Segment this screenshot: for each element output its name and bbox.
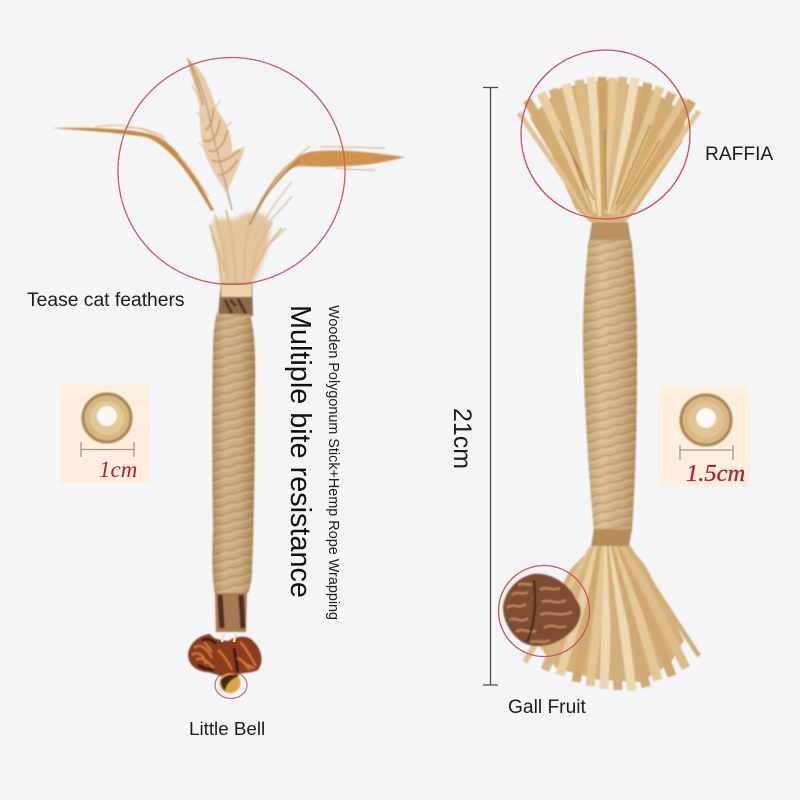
inset: 1.5cm cross-section (659, 386, 749, 487)
right toy: raffia stick (503, 77, 699, 691)
heading: multiple bite resistance: Multiple bite resistance (284, 305, 316, 598)
inset: 1cm cross-section (60, 385, 150, 484)
bell circle (215, 672, 247, 698)
highlight circle: raffia (521, 50, 690, 219)
label: tease cat feathers: Tease cat feathers (27, 290, 185, 311)
raffia: bottom skirt (525, 545, 699, 691)
collar: top (588, 222, 632, 248)
string: fruit to wood (222, 632, 236, 642)
label: little bell: Little Bell (189, 718, 265, 739)
inset: 1.5cm cross-section: 1.5cm (686, 460, 745, 487)
gall fruits (188, 634, 261, 677)
feather: long left (52, 128, 214, 211)
raffia: top fan (519, 77, 699, 222)
feather: centre (187, 58, 245, 212)
feather: down tuft (212, 212, 270, 284)
inset: 1cm cross-section: 1cm (99, 457, 137, 482)
feather: right (248, 151, 405, 228)
wood: top (218, 283, 253, 316)
label: raffia: RAFFIA (705, 144, 773, 165)
highlight circle: gall fruit (498, 566, 590, 656)
left toy: feather stick (52, 58, 405, 698)
dimension label: 21cm (448, 408, 476, 469)
gall fruit (503, 574, 581, 646)
label: gall fruit: Gall Fruit (508, 697, 586, 718)
collar: bottom (591, 529, 632, 546)
dimension line: 21cm (448, 87, 498, 685)
highlight circle: feathers (118, 58, 345, 284)
feathers (52, 58, 405, 284)
rope: right (583, 240, 637, 530)
label: stick and rope material: Wooden Polygonum Stick+Hemp Rope Wrapping (325, 305, 341, 620)
rope: left (212, 310, 255, 593)
wood: bottom (215, 590, 247, 632)
bell (220, 673, 240, 693)
